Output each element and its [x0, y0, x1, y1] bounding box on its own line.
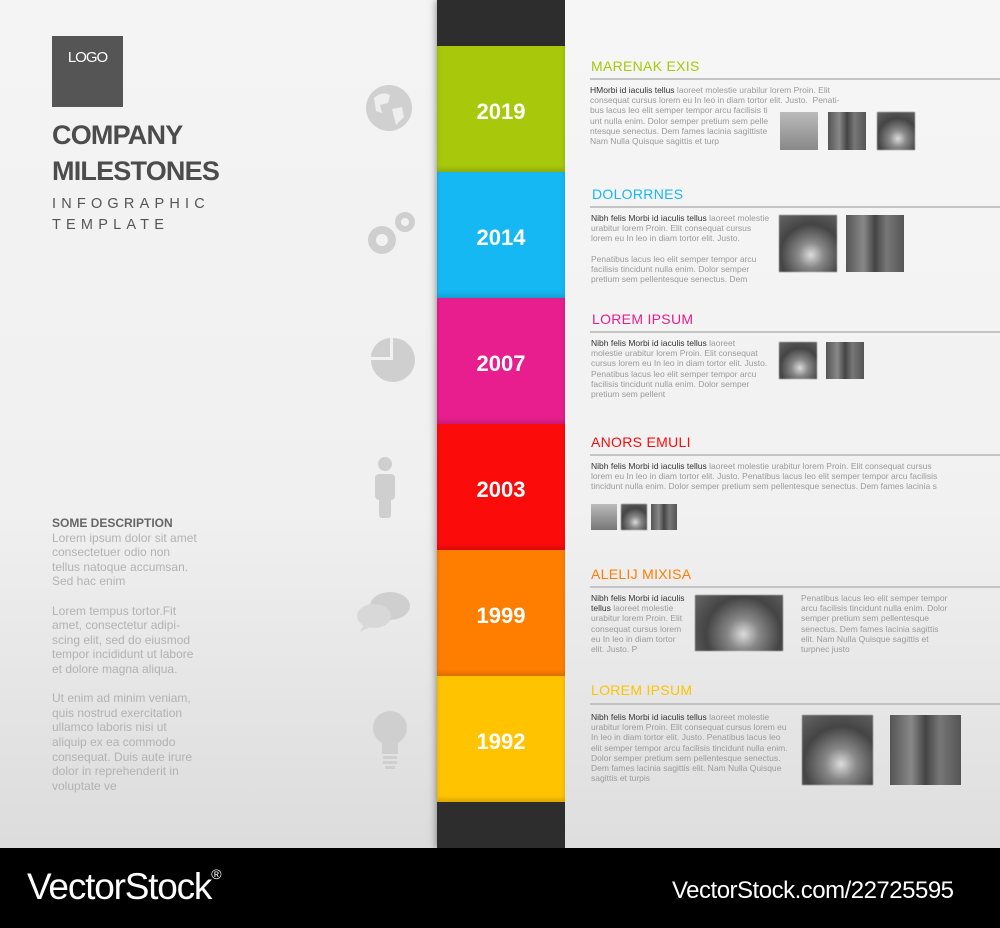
milestone 1992: LOREM IPSUM [591, 682, 692, 698]
milestone 2003: ANORS EMULI [591, 434, 691, 450]
milestone 2014: Penatibus lacus leo elit semper tempor arcu facilisis tincidunt nulla enim. Dolor semper pretium sem pellentesque senectus. Dem [591, 254, 756, 284]
description: Sed hac enim [52, 574, 125, 588]
title: MILESTONES [52, 156, 219, 186]
icon: person [375, 457, 395, 518]
milestone 1999: Nibh felis Morbi id iaculis tellus laoreet molestie urabitur lorem Proin. Elit consequat cursus lorem eu In leo in diam tortor elit. Justo. P [591, 593, 685, 654]
milestone 2019: ntesque senectus. Dem fames lacinia sagittiste [590, 126, 767, 136]
milestone 2019: HMorbi id iaculis tellus laoreet molestie urabilur lorem Proin. Elit consequat cursus lorem eu In leo in diam tortor elit. Justo. Penati- [590, 85, 839, 105]
left panel [0, 0, 437, 848]
description: dolor in reprehenderit in [52, 764, 179, 778]
description: voluptate ve [52, 779, 117, 793]
milestone 2007: Nibh felis Morbi id iaculis tellus laoreet molestie urabitur lorem Proin. Elit consequat cursus lorem eu In leo in diam tortor elit. Justo. Penatibus lacus leo elit semper tempor arcu facilisis tincidunt nulla enim. Dolor semper pretium sem pellent [591, 338, 767, 399]
description: SOME DESCRIPTION [52, 516, 173, 530]
milestone 2003: Nibh felis Morbi id iaculis tellus laoreet molestie urabitur lorem Proin. Elit consequat cursus lorem eu In leo in diam tortor elit. Justo. Penatibus lacus leo elit semper tempor arcu facilisis tincidunt nulla enim. Dolor semper pretium sem pellentesque senectus. Dem fames lacinia s [591, 461, 937, 491]
right panel [565, 0, 1000, 848]
milestone 1992: Nibh felis Morbi id iaculis tellus laoreet molestie urabitur lorem Proin. Elit consequat cursus lorem eu In leo in diam tortor elit. Justo. Penatibus lacus leo elit semper tempor arcu facilisis tincidunt nulla enim. Dolor semper pretium sem pellentesque senectus. Dem fames lacinia sagittis elit. Nam Nulla Quisque sagittis et turpis [591, 712, 788, 783]
subtitle: TEMPLATE [52, 217, 169, 233]
description: consectetuer odio non [52, 545, 170, 559]
title: COMPANY [52, 120, 182, 150]
icon: pie chart [371, 338, 415, 382]
icon: light bulb [373, 711, 407, 769]
timeline strip: 1992 [477, 729, 525, 754]
milestone 1992 [590, 682, 1000, 786]
description [52, 516, 197, 793]
icon: gears [368, 212, 415, 254]
description: quis nostrud exercitation [52, 706, 182, 720]
description: aliquip ex ea commodo [52, 735, 175, 749]
footer id: VectorStock.com/22725595 [672, 877, 954, 904]
milestone 2014: Nibh felis Morbi id iaculis tellus laoreet molestie urabitur lorem Proin. Elit consequat cursus lorem eu In leo in diam tortor elit. Justo. [591, 213, 769, 243]
description: scing elit, sed do eiusmod [52, 633, 190, 647]
milestone 2014: DOLORRNES [592, 186, 683, 202]
description: Lorem ipsum dolor sit amet [52, 531, 197, 545]
logo [52, 36, 123, 107]
milestone 1999 [590, 566, 1000, 654]
milestone 2007 [590, 311, 1000, 399]
milestone 2019 [590, 58, 1000, 151]
milestone 2003 [590, 434, 1000, 531]
timeline strip: 2003 [477, 477, 525, 502]
description: tellus natoque accumsan. [52, 560, 188, 574]
description: amet, consectetur adipi- [52, 618, 180, 632]
description: ullamco laboris nisi ut [52, 720, 167, 734]
timeline strip [437, 0, 565, 848]
milestone 2014 [590, 186, 1000, 284]
description: consequat. Duis aute irure [52, 750, 192, 764]
subtitle: INFOGRAPHIC [52, 196, 210, 212]
milestone 2007: LOREM IPSUM [592, 311, 693, 327]
timeline strip: 2007 [477, 351, 525, 376]
milestone 2019: MARENAK EXIS [591, 58, 700, 74]
milestone 2019: bus lacus leo elit semper tempor arcu facilisis ti [590, 105, 768, 115]
timeline strip: 2014 [477, 225, 525, 250]
logo: LOGO [68, 49, 107, 66]
milestone 1999: ALELIJ MIXISA [591, 566, 691, 582]
footer brand: VectorStock® [27, 866, 220, 907]
milestone 2019: unt nulla enim. Dolor semper pretium sem pelle [590, 116, 768, 126]
description: tempor incididunt ut labore [52, 647, 193, 661]
subtitle [52, 196, 210, 233]
description: Ut enim ad minim veniam, [52, 691, 191, 705]
milestone 1999: Penatibus lacus leo elit semper tempor arcu facilisis tincidunt nulla enim. Dolor semper pretium sem pellentesque senectus. Dem fames lacinia sagittis elit. Nam Nulla Quisque sagittis et turpnec justo [801, 593, 947, 654]
timeline strip: 1999 [477, 603, 525, 628]
milestone 2019: Nam Nulla Quisque sagittis et turp [590, 136, 719, 146]
timeline strip: 2019 [477, 99, 525, 124]
title [52, 120, 219, 186]
footer bar [0, 848, 1000, 928]
icon: speech bubbles [357, 592, 410, 632]
description: et dolore magna aliqua. [52, 662, 177, 676]
description: Lorem tempus tortor.Fit [52, 604, 176, 618]
icon: globe [366, 85, 412, 131]
